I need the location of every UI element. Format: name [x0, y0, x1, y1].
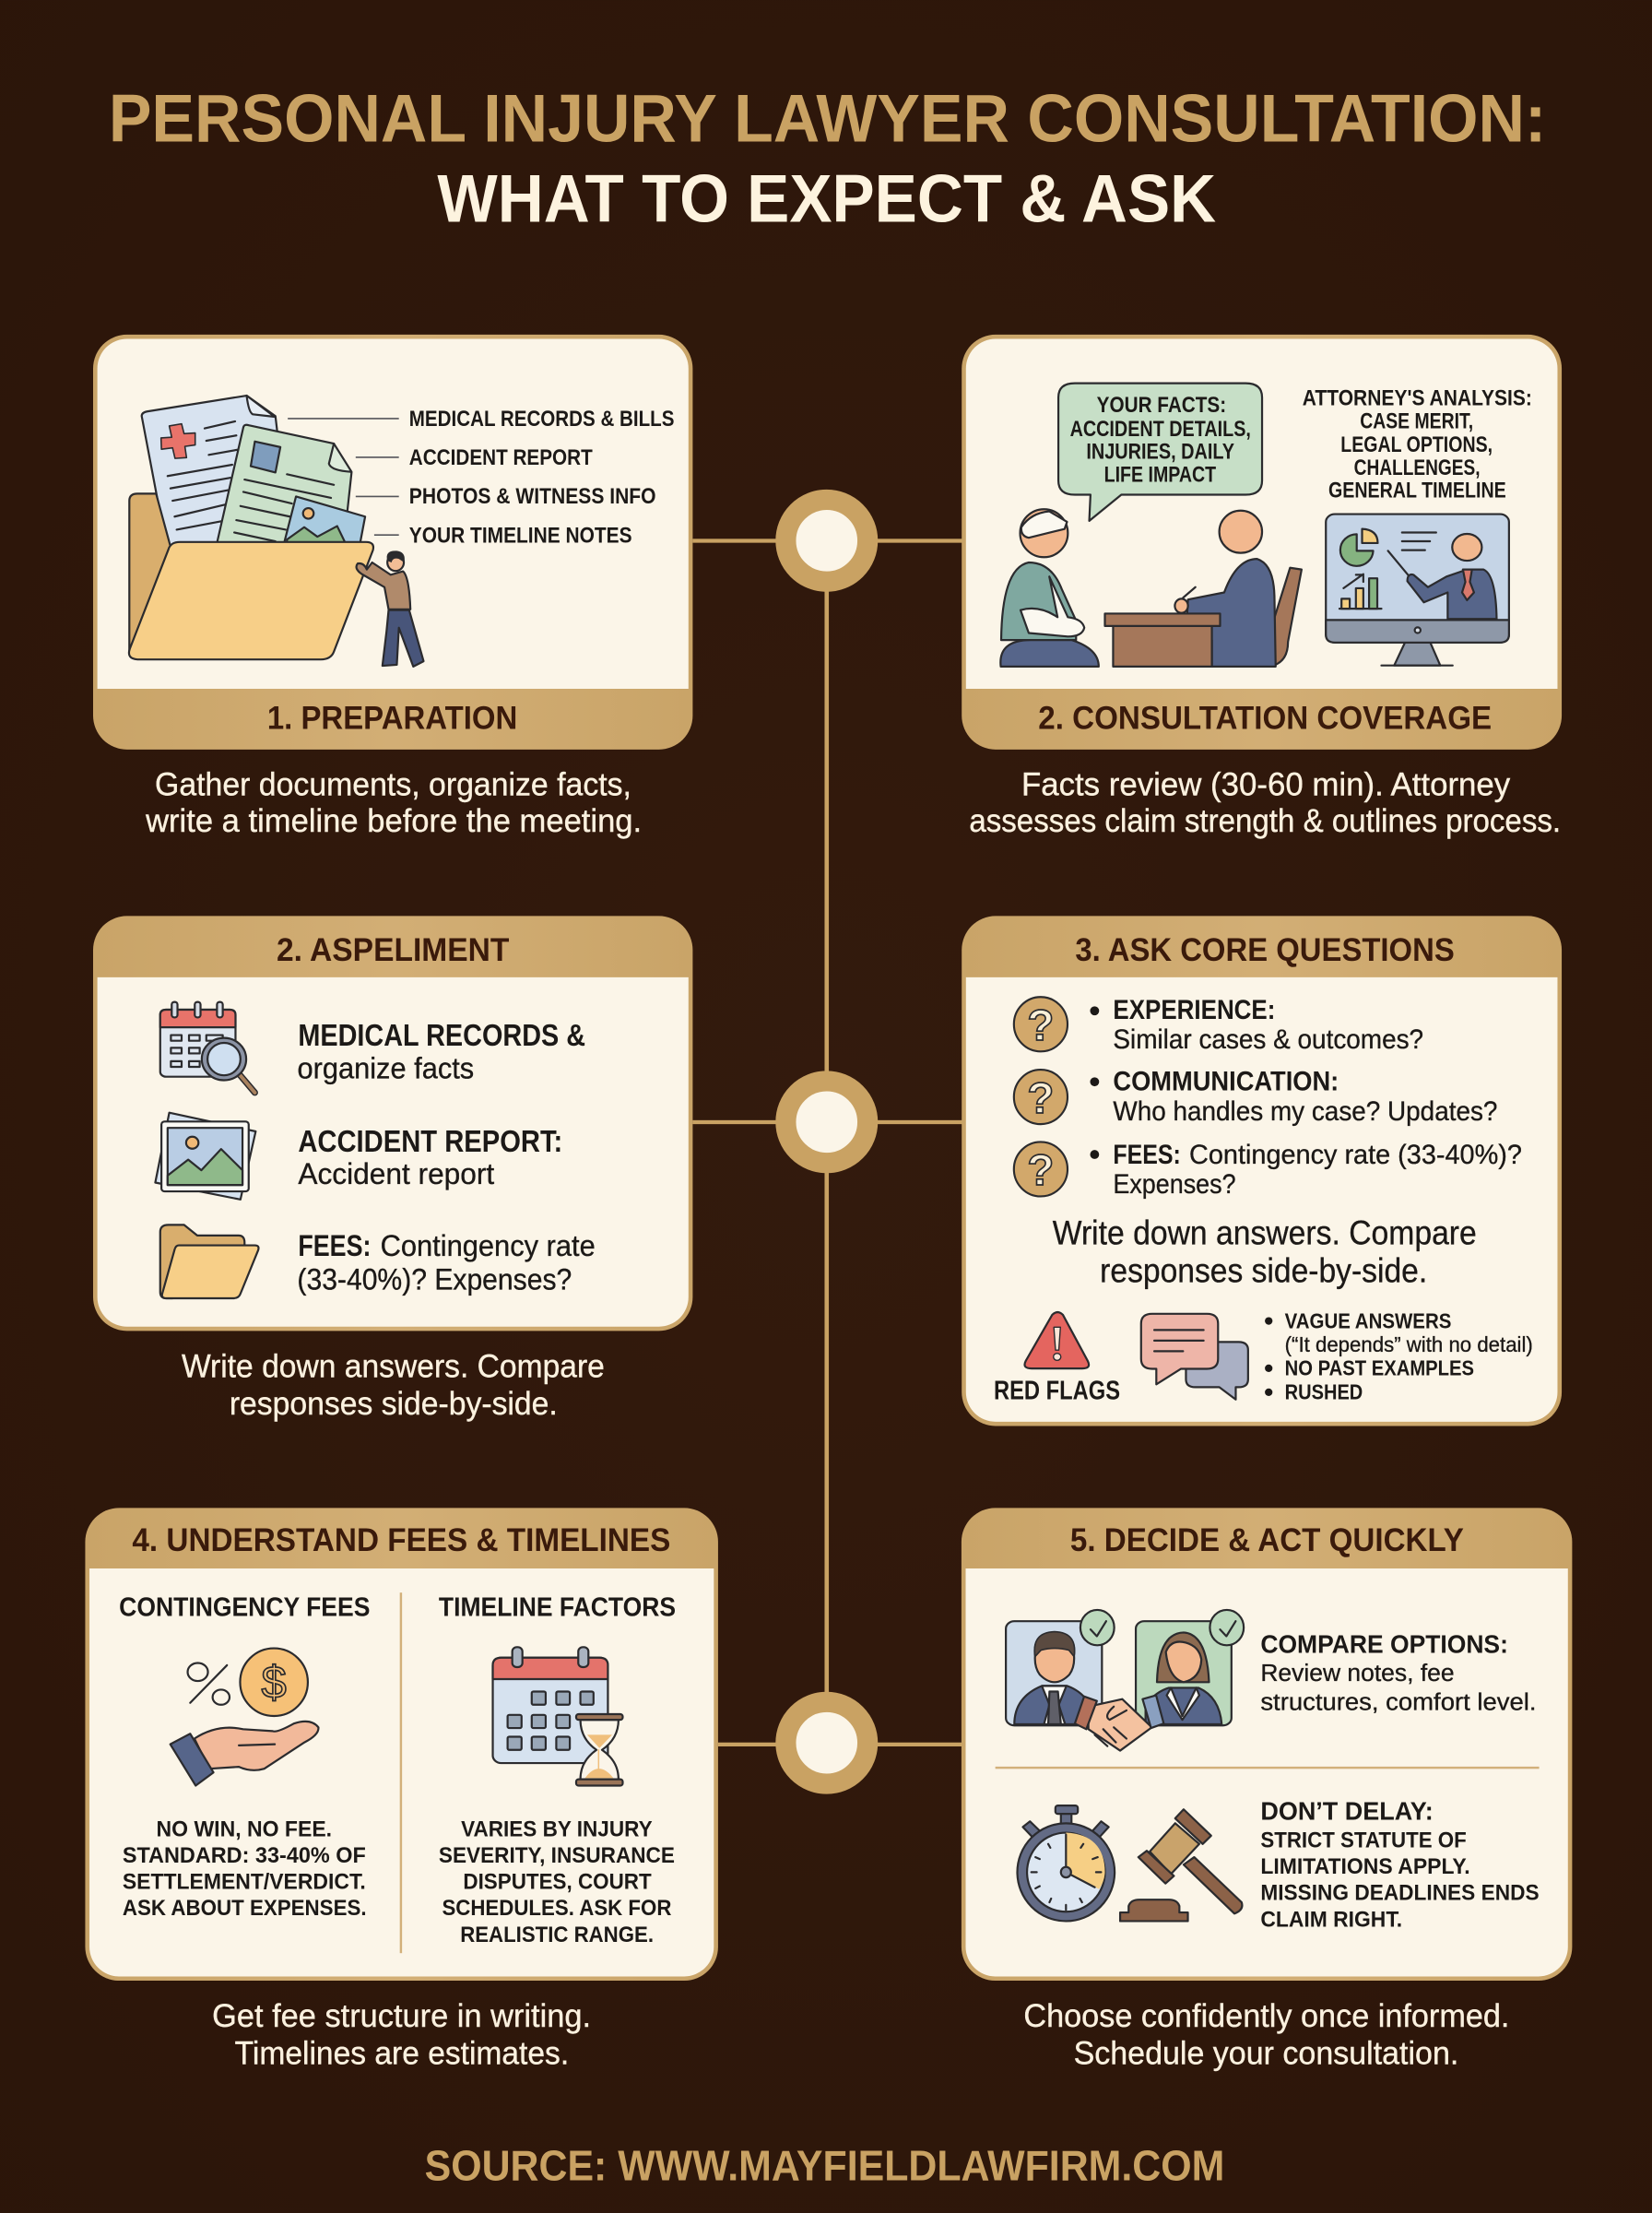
text: fee explanation: NO WIN, NO FEE. [157, 1817, 332, 1841]
icon: question badge experience [1014, 997, 1068, 1051]
heading: 2. ASPELIMENT [277, 932, 510, 968]
text: compare options: structures, comfort level. [1260, 1687, 1537, 1715]
subheading: timeline factors: TIMELINE FACTORS [439, 1592, 676, 1621]
red flags list: RUSHED [1285, 1380, 1363, 1404]
caption: fee structure: Timelines are estimates. [235, 2035, 569, 2071]
caption: preparation: Gather documents, organize facts, [155, 767, 631, 803]
text: don't delay: STRICT STATUTE OF [1260, 1828, 1467, 1852]
speech bubble text: your facts: YOUR FACTS: [1097, 394, 1226, 418]
text: compare options [1260, 1630, 1537, 1715]
divider [996, 1767, 1540, 1769]
caption: fee structure: Get fee structure in writing. [212, 1998, 591, 2034]
text: don't delay: LIMITATIONS APPLY. [1260, 1854, 1470, 1879]
icon: two attorneys shaking hands [1006, 1610, 1244, 1751]
panel: 5. decide and act quickly [962, 1508, 1572, 1981]
caption: consultation coverage: Facts review (30-60 min). Attorney [1021, 767, 1511, 803]
text: fee explanation: STANDARD: 33-40% OF [123, 1843, 366, 1868]
icon: folder [160, 1225, 258, 1298]
attorney's analysis text: LEGAL OPTIONS, [1340, 433, 1493, 457]
title: PERSONAL INJURY LAWYER CONSULTATION: [109, 80, 1546, 156]
caption: preparation: write a timeline before the meeting. [145, 803, 642, 839]
icon: gavel [1120, 1809, 1242, 1921]
icon: calendar with hourglass [493, 1647, 622, 1786]
caption: choose confidently [1023, 1998, 1509, 2071]
checklist labels: ACCIDENT REPORT [409, 445, 593, 470]
item: medical records: MEDICAL RECORDS & [298, 1019, 585, 1053]
item: fees: (33-40%)? Expenses? [297, 1262, 572, 1296]
speech bubble text: your facts: INJURIES, DAILY [1086, 440, 1234, 464]
caption: consultation coverage: assesses claim strength & outlines process. [969, 803, 1561, 839]
caption: preparation [145, 767, 642, 839]
text: timeline explanation: DISPUTES, COURT [463, 1870, 652, 1895]
attorney's analysis text: CHALLENGES, [1354, 456, 1481, 480]
question: fees: Contingency rate (33-40%)? [1189, 1140, 1522, 1170]
advice text [1053, 1213, 1477, 1289]
text: don't delay [1260, 1797, 1540, 1933]
red flags list: (“It depends” with no detail) [1285, 1332, 1533, 1356]
attorney's analysis text: ATTORNEY'S ANALYSIS: [1303, 386, 1532, 410]
icon: question badge communication: ? [1027, 1074, 1054, 1123]
text: timeline explanation: SEVERITY, INSURANCE [439, 1843, 675, 1868]
heading: 3. ASK CORE QUESTIONS [1075, 932, 1455, 968]
icon: question badge fees: ? [1027, 1146, 1054, 1195]
advice text: responses side-by-side. [1100, 1251, 1427, 1289]
item: fees: Contingency rate [381, 1229, 596, 1262]
caption: write down answers: responses side-by-side. [230, 1386, 558, 1422]
speech bubble text: your facts: LIFE IMPACT [1104, 464, 1217, 488]
checklist labels: MEDICAL RECORDS & BILLS [409, 407, 674, 432]
illustration: documents in folder with person [129, 396, 423, 667]
attorney's analysis text: CASE MERIT, [1360, 409, 1473, 433]
panel: 4. understand fees and timelines [85, 1508, 718, 1981]
text: compare options: COMPARE OPTIONS: [1260, 1630, 1508, 1659]
item: fees [297, 1229, 596, 1296]
leader lines [288, 419, 399, 535]
text: fee explanation [123, 1817, 367, 1921]
text: timeline explanation: REALISTIC RANGE. [460, 1923, 654, 1947]
attorney's analysis text [1303, 386, 1532, 503]
speech bubble text: your facts [1070, 394, 1251, 488]
speech bubble text: your facts: ACCIDENT DETAILS, [1070, 418, 1251, 442]
heading: 5. DECIDE & ACT QUICKLY [1070, 1522, 1464, 1558]
advice text: Write down answers. Compare [1053, 1213, 1477, 1251]
item: accident report: Accident report [298, 1157, 494, 1190]
icon: question badge communication [1014, 1070, 1068, 1124]
icon: question badge experience: ? [1027, 1001, 1054, 1050]
checklist labels: PHOTOS & WITNESS INFO [409, 484, 656, 509]
caption: choose confidently: Schedule your consultation. [1074, 2035, 1458, 2071]
title: WHAT TO EXPECT & ASK [437, 160, 1216, 236]
icon: photos [155, 1113, 255, 1200]
checklist labels [409, 407, 674, 548]
subheading: contingency fees: CONTINGENCY FEES [119, 1592, 370, 1621]
question: experience [1090, 995, 1423, 1055]
label: red flags: RED FLAGS [994, 1377, 1120, 1406]
panel: 3. ask core questions [962, 916, 1562, 1426]
icon: calendar with magnifier [160, 1002, 254, 1093]
text: compare options: Review notes, fee [1260, 1659, 1455, 1686]
timeline spine and nodes [692, 500, 962, 1784]
icon: hand holding coin with percent: $ [262, 1658, 287, 1708]
illustration: client and attorney meeting [1000, 384, 1509, 667]
caption: consultation coverage [969, 767, 1561, 839]
item: accident report: ACCIDENT REPORT: [298, 1125, 562, 1159]
heading: 1. PREPARATION [267, 700, 517, 736]
text: fee explanation: SETTLEMENT/VERDICT. [123, 1870, 366, 1895]
icon: warning triangle [1024, 1312, 1089, 1368]
divider [400, 1592, 402, 1953]
text: don't delay: MISSING DEADLINES ENDS [1260, 1880, 1540, 1905]
item: accident report [298, 1125, 562, 1190]
source footer: SOURCE: WWW.MAYFIELDLAWFIRM.COM [425, 2142, 1224, 2190]
panel: 2. aspeliment [93, 916, 692, 1331]
red flags list [1265, 1309, 1533, 1404]
question: fees: FEES: [1113, 1140, 1181, 1170]
red flags list: NO PAST EXAMPLES [1285, 1356, 1474, 1380]
question: fees: Expenses? [1113, 1169, 1236, 1200]
heading: 2. CONSULTATION COVERAGE [1038, 700, 1492, 736]
text: fee explanation: ASK ABOUT EXPENSES. [123, 1896, 367, 1921]
icon: speech bubbles [1141, 1314, 1248, 1400]
panel: 1. preparation [93, 335, 692, 750]
caption: choose confidently: Choose confidently once informed. [1023, 1998, 1509, 2034]
item: medical records [297, 1019, 585, 1084]
caption: write down answers: Write down answers. Compare [182, 1349, 605, 1385]
title [109, 80, 1546, 236]
text: don't delay: DON’T DELAY: [1260, 1797, 1434, 1826]
icon: question badge fees [1014, 1142, 1068, 1196]
heading: 4. UNDERSTAND FEES & TIMELINES [132, 1522, 670, 1558]
question: communication [1090, 1066, 1497, 1127]
panel: 2. consultation coverage [962, 335, 1562, 750]
question: communication: COMMUNICATION: [1113, 1066, 1339, 1096]
question: experience: Similar cases & outcomes? [1113, 1024, 1423, 1055]
caption: write down answers [182, 1349, 605, 1422]
text: timeline explanation: VARIES BY INJURY [461, 1817, 653, 1841]
caption: fee structure [212, 1998, 591, 2071]
icon: stopwatch [1018, 1805, 1115, 1921]
icon: hand holding coin with percent [171, 1649, 318, 1786]
red flags list: VAGUE ANSWERS [1285, 1309, 1451, 1333]
question: fees [1090, 1140, 1522, 1200]
question: experience: EXPERIENCE: [1113, 995, 1275, 1025]
text: don't delay: CLAIM RIGHT. [1260, 1908, 1402, 1933]
text: timeline explanation [439, 1817, 675, 1947]
text: timeline explanation: SCHEDULES. ASK FOR [442, 1896, 672, 1921]
question: communication: Who handles my case? Updates? [1113, 1096, 1497, 1127]
item: medical records: organize facts [297, 1051, 474, 1084]
item: fees: FEES: [298, 1229, 371, 1262]
attorney's analysis text: GENERAL TIMELINE [1328, 479, 1506, 503]
checklist labels: YOUR TIMELINE NOTES [409, 523, 632, 548]
